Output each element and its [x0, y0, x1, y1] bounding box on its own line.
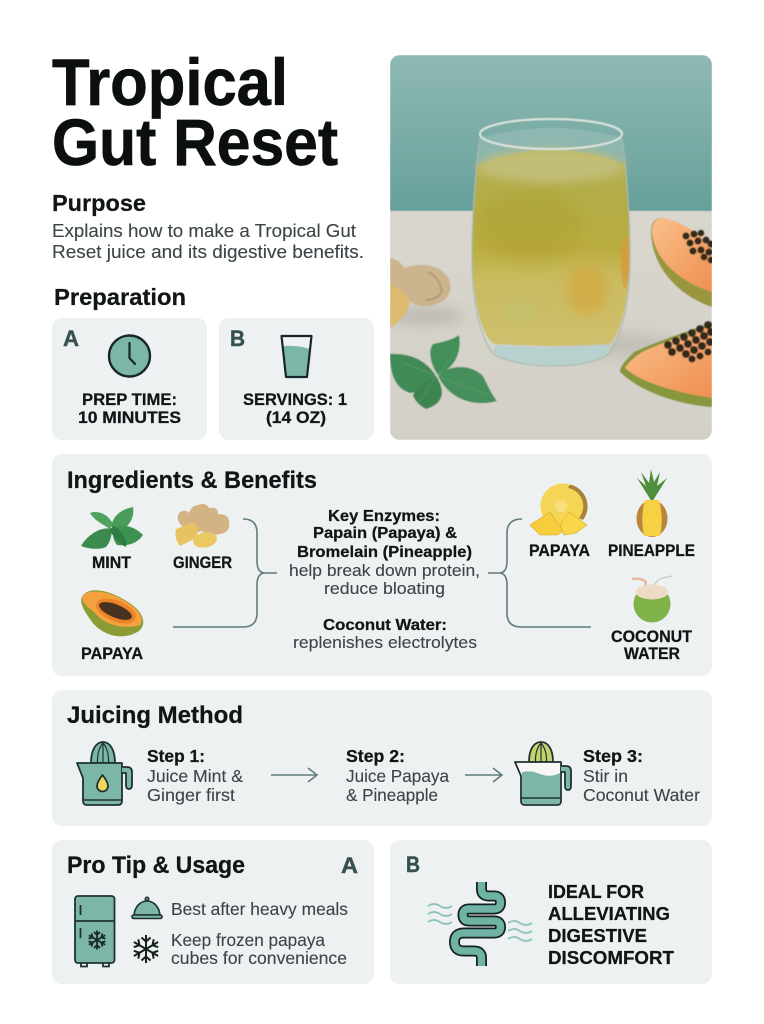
label: GINGER	[173, 554, 232, 572]
heading: preparation: Preparation	[54, 284, 186, 310]
step 3 text	[583, 746, 700, 805]
coconut water text: replenishes electrolytes	[293, 634, 477, 652]
icon: serving cloche	[132, 897, 162, 918]
purpose text block: Reset juice and its digestive benefits.	[52, 242, 364, 262]
mint	[390, 335, 497, 409]
panel: servings: SERVINGS: 1	[243, 390, 347, 409]
statement text: ALLEVIATING	[548, 903, 670, 924]
step 2 text	[346, 746, 449, 805]
icon: papaya half	[81, 590, 143, 636]
step 1 text: Ginger first	[147, 785, 235, 805]
icon: mint	[81, 507, 143, 549]
purpose text block: Explains how to make a Tropical Gut	[52, 221, 356, 241]
icon: clock	[109, 336, 150, 376]
step 2 text: Juice Papaya	[346, 766, 449, 786]
coconut water text: Coconut Water:	[323, 617, 447, 634]
statement text: IDEAL FOR	[548, 881, 644, 902]
heading: Juicing Method	[67, 702, 243, 729]
icon: jug with reamer	[515, 742, 571, 805]
label: PAPAYA	[529, 542, 590, 560]
panel: prep time: PREP TIME:	[82, 390, 177, 409]
panel: servings	[219, 318, 374, 440]
label	[611, 628, 692, 663]
ginger	[390, 258, 451, 306]
icon: coconut with straw	[632, 576, 673, 622]
tip text: cubes for convenience	[171, 948, 347, 968]
photo: juice glass with ginger, mint and papaya	[385, 55, 715, 440]
right bracket	[488, 519, 591, 627]
icon: right waves	[508, 921, 532, 941]
step 1 text	[147, 746, 243, 805]
step 2 text: & Pineapple	[346, 785, 438, 805]
panel: pro tip and usage	[52, 840, 374, 984]
key enzymes text: reduce bloating	[324, 580, 445, 598]
label: WATER	[624, 645, 680, 663]
step 3 text: Coconut Water	[583, 785, 700, 805]
panel: juicing method	[52, 690, 712, 826]
icon: glass of water	[282, 336, 312, 377]
key enzymes text: Papain (Papaya) &	[313, 525, 457, 542]
tip text	[171, 930, 347, 968]
heading: Pro Tip & Usage	[67, 852, 245, 879]
purpose text block: Purpose	[52, 190, 146, 216]
icon: juicer with drop	[77, 742, 132, 805]
icon: pineapple slices	[530, 484, 588, 535]
icon: intestine	[454, 882, 500, 966]
panel: servings: B	[230, 326, 245, 351]
juice	[472, 150, 630, 346]
key enzymes text: help break down protein,	[289, 562, 480, 580]
tip text: Best after heavy meals	[171, 899, 348, 919]
icon: snowflake	[132, 935, 160, 963]
statement text	[548, 881, 675, 968]
panel: prep time: 10 MINUTES	[78, 408, 181, 427]
step 3 text: Stir in	[583, 766, 628, 786]
icon: left waves	[428, 904, 452, 924]
heading: Ingredients & Benefits	[67, 467, 317, 494]
icon: ginger	[176, 504, 229, 549]
arrow	[465, 768, 502, 782]
panel: ingredients and benefits	[52, 454, 712, 676]
arrow	[271, 768, 317, 782]
panel: prep time	[52, 318, 207, 440]
purpose text block	[52, 190, 364, 262]
top papaya slice	[651, 218, 712, 307]
panel: pro tip and usage: A	[341, 853, 358, 878]
step 3 text: Step 3:	[583, 746, 643, 766]
step 1 text: Step 1:	[147, 746, 205, 766]
panel: servings: (14 OZ)	[266, 408, 326, 427]
bottom papaya slice	[620, 322, 712, 407]
coconut water text	[293, 617, 477, 652]
statement text: DIGESTIVE	[548, 925, 647, 946]
title: Tropical	[52, 45, 288, 119]
label: PAPAYA	[81, 645, 143, 663]
step 1 text: Juice Mint &	[147, 766, 243, 786]
label: MINT	[92, 554, 131, 572]
label: PINEAPPLE	[608, 542, 695, 560]
label: COCONUT	[611, 628, 692, 646]
key enzymes text	[289, 508, 480, 598]
icon: pineapple	[636, 469, 668, 537]
title: Gut Reset	[52, 105, 338, 179]
title	[52, 45, 338, 179]
panel: prep time: A	[63, 326, 79, 351]
panel: ideal for digestive discomfort	[390, 840, 712, 984]
panel: ideal for digestive discomfort: B	[406, 852, 420, 877]
glass	[478, 128, 624, 344]
key enzymes text: Key Enzymes:	[328, 508, 440, 525]
step 2 text: Step 2:	[346, 746, 405, 766]
statement text: DISCOMFORT	[548, 947, 675, 968]
left bracket	[173, 519, 277, 627]
tip text: Keep frozen papaya	[171, 930, 325, 950]
icon: fridge	[75, 896, 114, 966]
key enzymes text: Bromelain (Pineapple)	[297, 544, 472, 561]
infographic page	[52, 55, 712, 984]
